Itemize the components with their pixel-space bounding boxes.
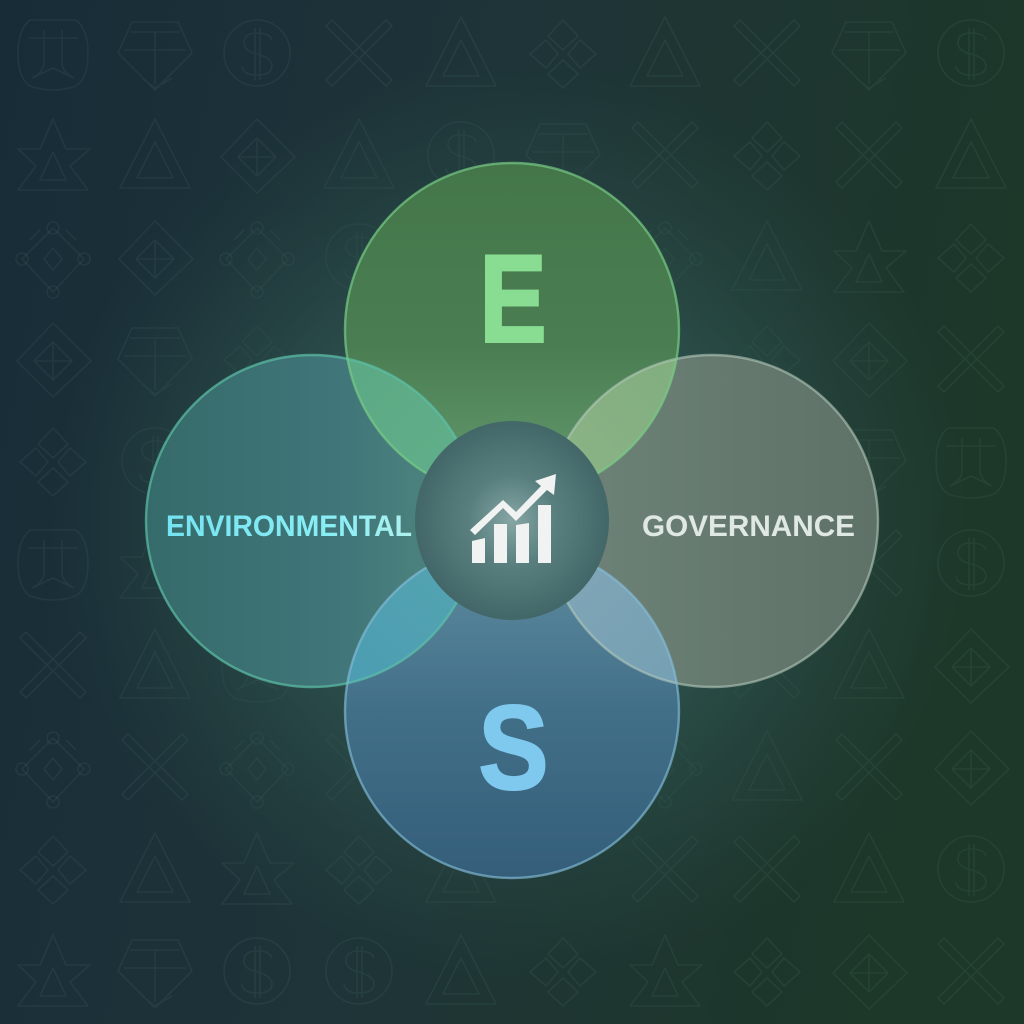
overlap: S and Governance xyxy=(568,568,676,683)
overlap: E and Environmental xyxy=(348,360,456,473)
label: ENVIRONMENTAL: ENVIRONMENTAL xyxy=(166,510,412,543)
label: GOVERNANCE: GOVERNANCE xyxy=(642,510,855,543)
center hub xyxy=(415,421,609,620)
circle: Governance (right) xyxy=(546,355,878,687)
overlap: S and Environmental xyxy=(348,568,456,682)
circle outlines xyxy=(146,163,878,878)
circle: Environmental (left) xyxy=(146,355,478,687)
circle: E (top) xyxy=(345,163,679,474)
overlap: E and Governance xyxy=(568,360,676,473)
circle: S (bottom) xyxy=(345,568,679,878)
letter S: S xyxy=(478,681,549,814)
letter E: E xyxy=(480,229,546,368)
icon: rising bar chart with arrow xyxy=(470,474,556,563)
